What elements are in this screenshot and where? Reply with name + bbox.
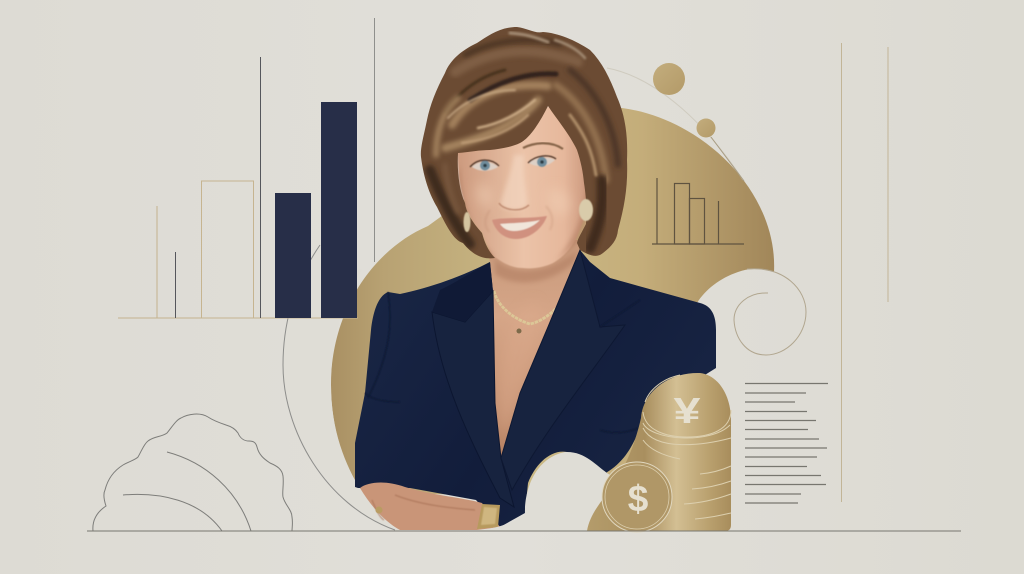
bar chart: left	[118, 57, 358, 318]
ring	[376, 506, 382, 514]
left earring	[464, 212, 470, 232]
neck and chest skin	[488, 240, 580, 458]
left collar	[432, 262, 493, 322]
right eye	[528, 156, 556, 167]
coin stack ridges	[643, 375, 731, 519]
dollar coin	[602, 462, 672, 532]
hair strands and highlights	[430, 33, 618, 248]
necklace pendant	[516, 328, 522, 334]
baseline	[87, 530, 961, 532]
swoosh cutout and outline	[283, 245, 400, 531]
spiral line	[734, 269, 806, 355]
left lapel	[432, 291, 514, 507]
cheek highlights	[477, 185, 570, 216]
decorative orbit dots	[607, 63, 744, 181]
right lapel	[501, 250, 625, 490]
small bar chart icon on gold	[652, 178, 744, 244]
left eye	[470, 160, 499, 171]
coin blob	[587, 373, 731, 532]
navy blazer	[355, 250, 716, 527]
necklace	[494, 291, 561, 324]
mouth	[492, 216, 547, 239]
text lines block	[745, 384, 828, 503]
nose	[501, 155, 527, 210]
woman portrait	[355, 27, 716, 530]
nose shadow	[499, 203, 529, 210]
thin vertical guide lines	[374, 18, 888, 502]
sleeve seam and fold shadows	[365, 292, 690, 433]
arm and hand	[360, 483, 500, 530]
dollar coin: $	[628, 478, 649, 519]
cloud cutout	[470, 452, 630, 531]
eyebrow	[523, 143, 563, 149]
smile lines	[485, 206, 552, 232]
face	[457, 104, 590, 268]
yen symbol: ¥	[674, 390, 700, 431]
gold wristwatch	[477, 504, 500, 529]
infographic illustration	[87, 18, 961, 532]
hair	[421, 27, 627, 258]
gold semicircle backdrop	[331, 108, 774, 500]
shell line drawing	[93, 414, 292, 531]
right earring	[579, 199, 593, 221]
face shading	[456, 165, 593, 262]
